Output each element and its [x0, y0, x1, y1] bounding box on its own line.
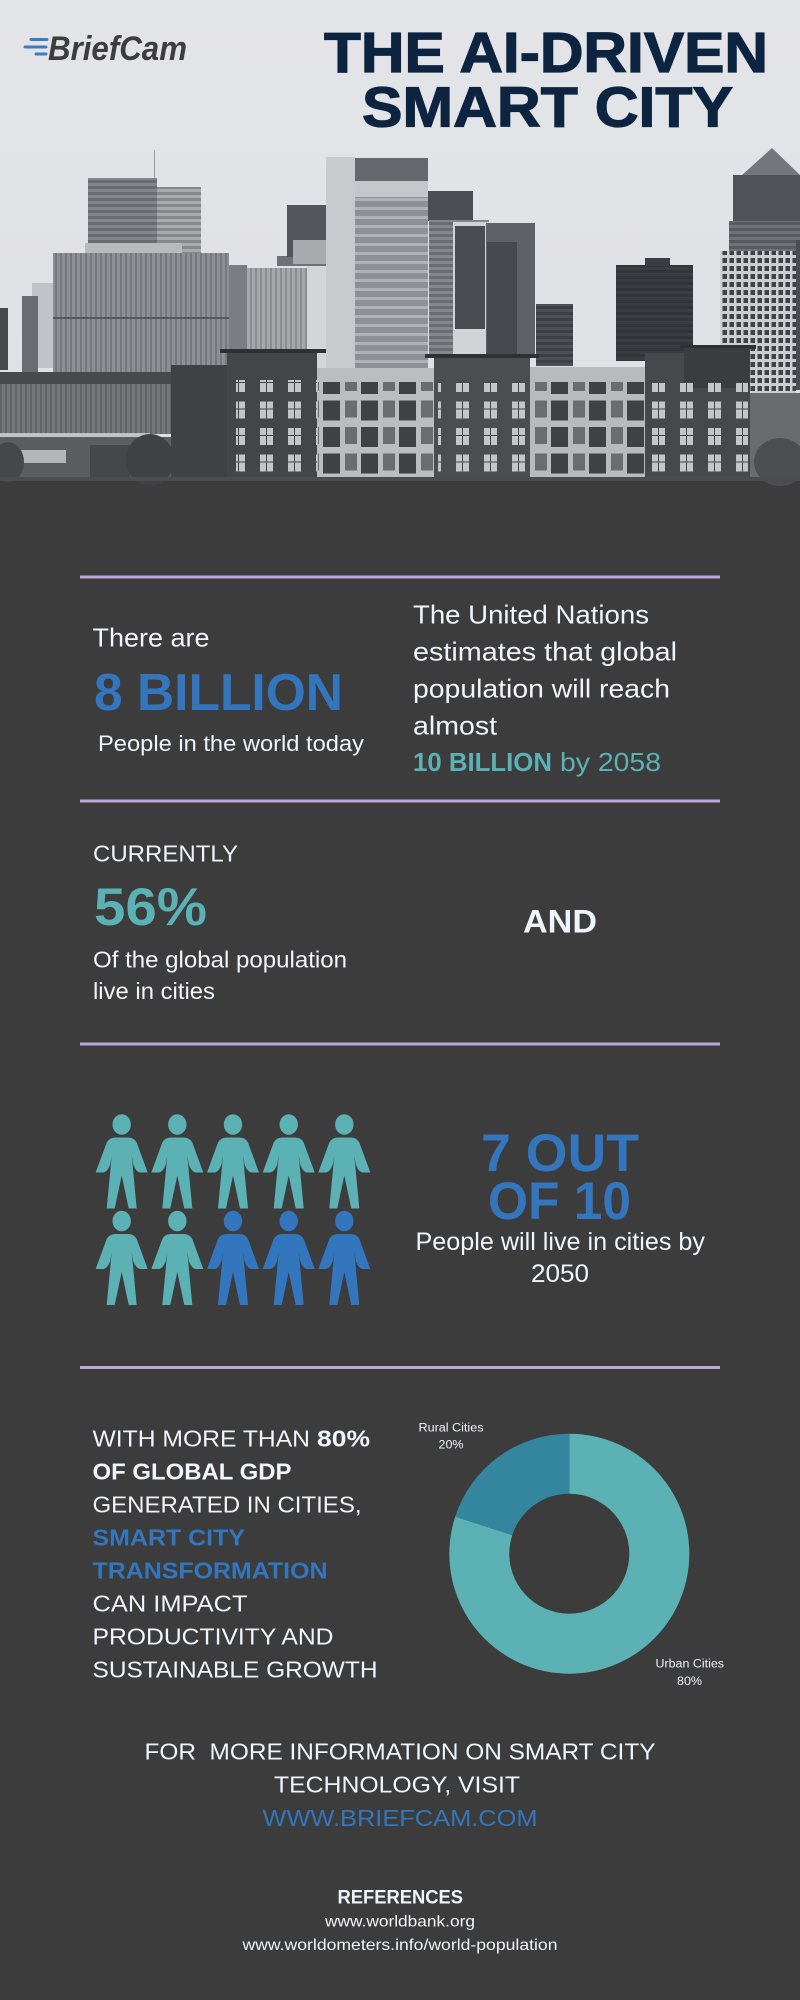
panel: 8 billion people today — [92, 622, 365, 756]
chart label: urban: Urban Cities — [656, 1658, 724, 1670]
panel: UN population estimate — [413, 600, 677, 777]
panel: 7 out of 10: 2050 — [531, 1260, 589, 1288]
call to action — [144, 1738, 656, 1831]
call to action: TECHNOLOGY, VISIT — [274, 1772, 520, 1798]
panel: 8 billion people today: People in the world today — [98, 731, 365, 756]
panel: GDP text: GENERATED IN CITIES, — [92, 1492, 362, 1518]
panel: 7 out of 10: OF 10 — [488, 1172, 631, 1231]
panel: currently 56%: Of the global population — [93, 946, 347, 972]
title: SMART CITY — [362, 76, 733, 140]
panel: currently 56% — [93, 840, 347, 1004]
header photo: city skyline — [0, 0, 800, 486]
chart label: rural — [418, 1422, 484, 1452]
panel: GDP text: CAN IMPACT — [92, 1590, 248, 1616]
panel: GDP text: SUSTAINABLE GROWTH — [92, 1656, 378, 1682]
panel: currently 56%: CURRENTLY — [93, 840, 238, 866]
panel: 7 out of 10: People will live in cities by — [416, 1228, 706, 1256]
panel: GDP text: 80% — [317, 1426, 370, 1452]
panel: 7 out of 10 — [416, 1124, 706, 1288]
references: www.worldometers.info/world-population — [241, 1937, 558, 1954]
panel: GDP text: TRANSFORMATION — [92, 1558, 328, 1584]
references: www.worldbank.org — [324, 1914, 475, 1930]
title: THE AI-DRIVEN — [324, 21, 768, 85]
call to action: WWW.BRIEFCAM.COM — [262, 1805, 538, 1831]
references: REFERENCES — [338, 1888, 463, 1908]
chart label: rural: Rural Cities — [418, 1422, 484, 1434]
references — [241, 1888, 558, 1954]
panel: GDP text: OF GLOBAL GDP — [92, 1458, 292, 1484]
panel: 8 billion people today: 8 BILLION — [94, 664, 343, 722]
panel: UN population estimate: estimates that global — [413, 636, 677, 666]
icon grid: 7 of 10 people — [96, 1114, 370, 1305]
chart label: urban — [656, 1658, 724, 1688]
donut chart: urban vs rural — [418, 1422, 724, 1688]
panel: UN population estimate: 10 BILLION — [413, 747, 552, 777]
panel: GDP text: WITH MORE THAN — [92, 1426, 310, 1452]
call to action: FOR MORE INFORMATION ON SMART CITY — [144, 1738, 656, 1764]
panel: currently 56%: live in cities — [93, 978, 215, 1004]
title — [324, 21, 768, 140]
panel: 7 out of 10: 7 OUT — [481, 1124, 639, 1183]
panel: currently 56%: 56% — [94, 878, 207, 937]
AND: AND — [523, 904, 597, 940]
panel: UN population estimate: by 2058 — [560, 747, 661, 777]
panel: UN population estimate: almost — [413, 710, 498, 740]
panel: GDP text: SMART CITY — [92, 1524, 245, 1550]
chart label: urban: 80% — [677, 1676, 702, 1688]
panel: UN population estimate: The United Nations — [413, 600, 649, 630]
panel: GDP text: PRODUCTIVITY AND — [92, 1624, 334, 1650]
panel: 8 billion people today: There are — [92, 622, 210, 652]
panel: GDP text — [92, 1426, 378, 1682]
chart label: rural: 20% — [438, 1440, 464, 1452]
panel: UN population estimate: population will reach — [413, 674, 670, 704]
logo: BriefCam: BriefCam — [48, 30, 187, 68]
